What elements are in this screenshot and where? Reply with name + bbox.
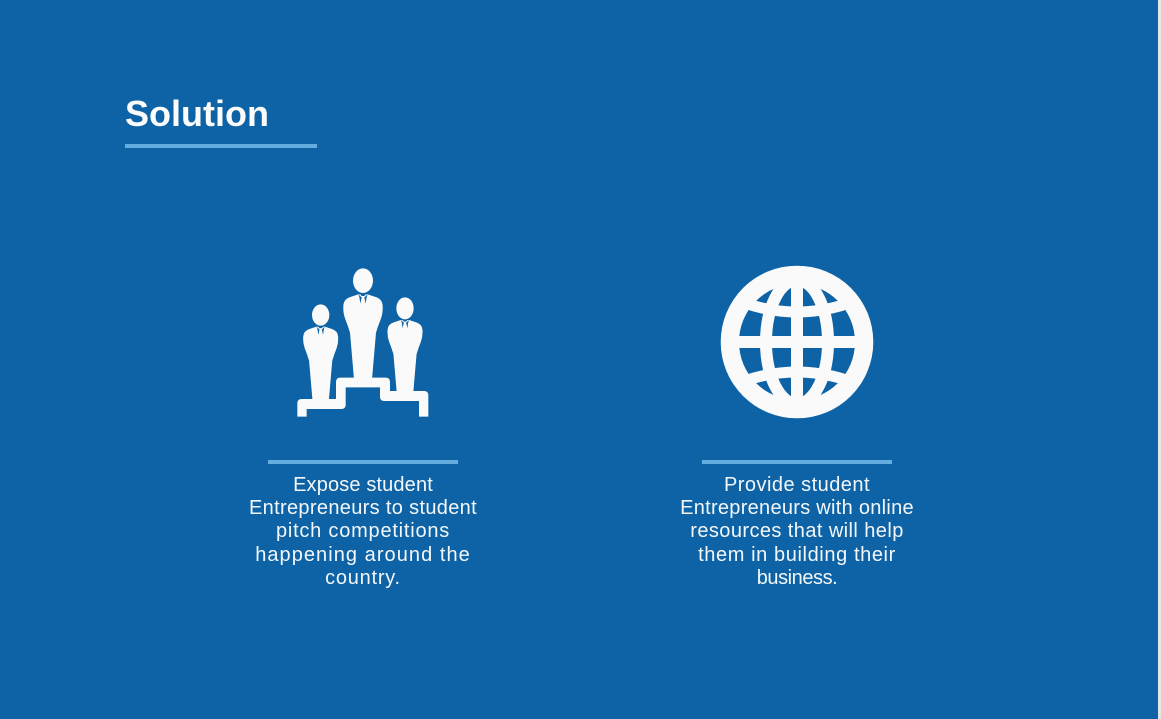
center person — [343, 268, 383, 379]
text: provide student entrepreneurs — [680, 474, 914, 589]
text: provide student entrepreneurs: business. — [757, 567, 837, 589]
text: provide student entrepreneurs: Entrepreneurs with online — [680, 497, 914, 519]
left divider bar — [268, 460, 458, 464]
text: expose student entrepreneurs: pitch competitions — [276, 520, 450, 542]
text: expose student entrepreneurs: country. — [325, 567, 401, 589]
left person — [303, 304, 338, 402]
title underline — [125, 144, 317, 148]
podium steps — [297, 378, 428, 417]
text: expose student entrepreneurs: Expose student — [293, 474, 433, 496]
icon: globe — [720, 266, 874, 418]
text: expose student entrepreneurs: Entrepreneurs to student — [249, 497, 477, 519]
right person — [387, 297, 423, 396]
icon: businessmen on podium — [297, 268, 428, 417]
right divider bar — [702, 460, 892, 464]
title: Solution — [125, 93, 269, 134]
right edge strip — [1158, 0, 1161, 719]
text: provide student entrepreneurs: them in building their — [698, 544, 896, 566]
text: provide student entrepreneurs: Provide student — [724, 474, 870, 496]
text: provide student entrepreneurs: resources that will help — [690, 520, 904, 542]
text: expose student entrepreneurs — [249, 474, 477, 589]
text: expose student entrepreneurs: happening around the — [255, 544, 471, 566]
